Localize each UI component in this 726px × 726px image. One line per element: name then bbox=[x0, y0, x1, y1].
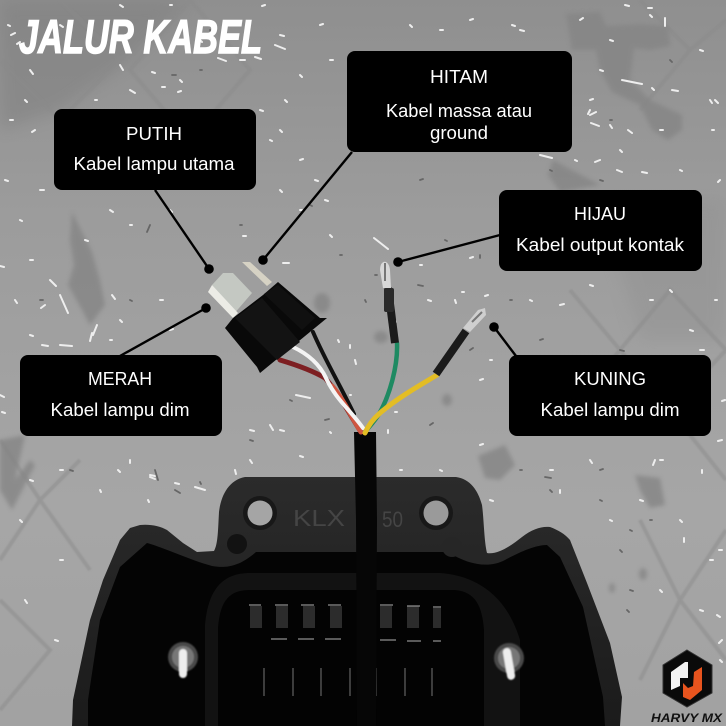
green wire terminal bbox=[380, 262, 395, 343]
headlamp housing: 50 bbox=[382, 507, 403, 532]
callout: putih bbox=[54, 109, 256, 190]
connector body bbox=[225, 282, 327, 373]
lens fins bbox=[249, 605, 441, 696]
H4 connector bbox=[208, 262, 327, 373]
callout: hitam: Kabel massa atau bbox=[386, 101, 532, 121]
leader: hitam bbox=[258, 152, 352, 265]
leader lines bbox=[120, 152, 516, 356]
callout: hijau: Kabel output kontak bbox=[516, 235, 685, 255]
callout: hitam bbox=[347, 51, 572, 152]
yellow wire terminal bbox=[436, 308, 486, 374]
callout: merah bbox=[20, 355, 222, 436]
mounting hole right bbox=[419, 496, 453, 530]
main black cable bbox=[354, 432, 377, 726]
callout: hitam: HITAM bbox=[430, 67, 488, 87]
callout: putih: PUTIH bbox=[126, 124, 182, 144]
leader: merah bbox=[120, 303, 211, 356]
embossed model text: KLX bbox=[293, 505, 345, 531]
dark speckles bbox=[40, 30, 672, 612]
logo orange mark bbox=[683, 667, 702, 700]
housing shell bbox=[72, 477, 622, 726]
dark background blotches bbox=[0, 12, 682, 593]
callout: kuning: Kabel lampu dim bbox=[540, 400, 680, 420]
callout: merah: Kabel lampu dim bbox=[50, 400, 189, 420]
bolt left bbox=[168, 642, 198, 678]
callout: hijau bbox=[499, 190, 702, 271]
title: JALUR KABEL bbox=[19, 10, 262, 63]
callout: kuning bbox=[509, 355, 711, 436]
callout: kuning: KUNING bbox=[574, 369, 646, 389]
logo white mark bbox=[671, 662, 688, 690]
connector blades bbox=[212, 273, 252, 315]
wires bbox=[280, 332, 437, 433]
headlamp housing bbox=[72, 477, 622, 726]
logo wordmark: HARVY MX bbox=[651, 711, 723, 725]
bolt right bbox=[494, 643, 524, 680]
red wire bbox=[280, 360, 361, 432]
logo: harvy mx bbox=[651, 650, 723, 725]
white wire bbox=[293, 347, 363, 428]
leader: kuning bbox=[489, 322, 516, 356]
callout: merah: MERAH bbox=[88, 369, 152, 389]
leader: putih bbox=[155, 190, 214, 274]
leader: hijau bbox=[393, 235, 500, 267]
callout: putih: Kabel lampu utama bbox=[74, 154, 236, 174]
logo hexagon bbox=[663, 650, 712, 707]
green wire bbox=[365, 343, 397, 432]
callout: hitam: ground bbox=[430, 123, 488, 143]
black wire bbox=[313, 332, 354, 414]
callout: hijau: HIJAU bbox=[574, 204, 626, 224]
yellow wire bbox=[365, 375, 437, 433]
mounting hole left bbox=[243, 496, 277, 530]
